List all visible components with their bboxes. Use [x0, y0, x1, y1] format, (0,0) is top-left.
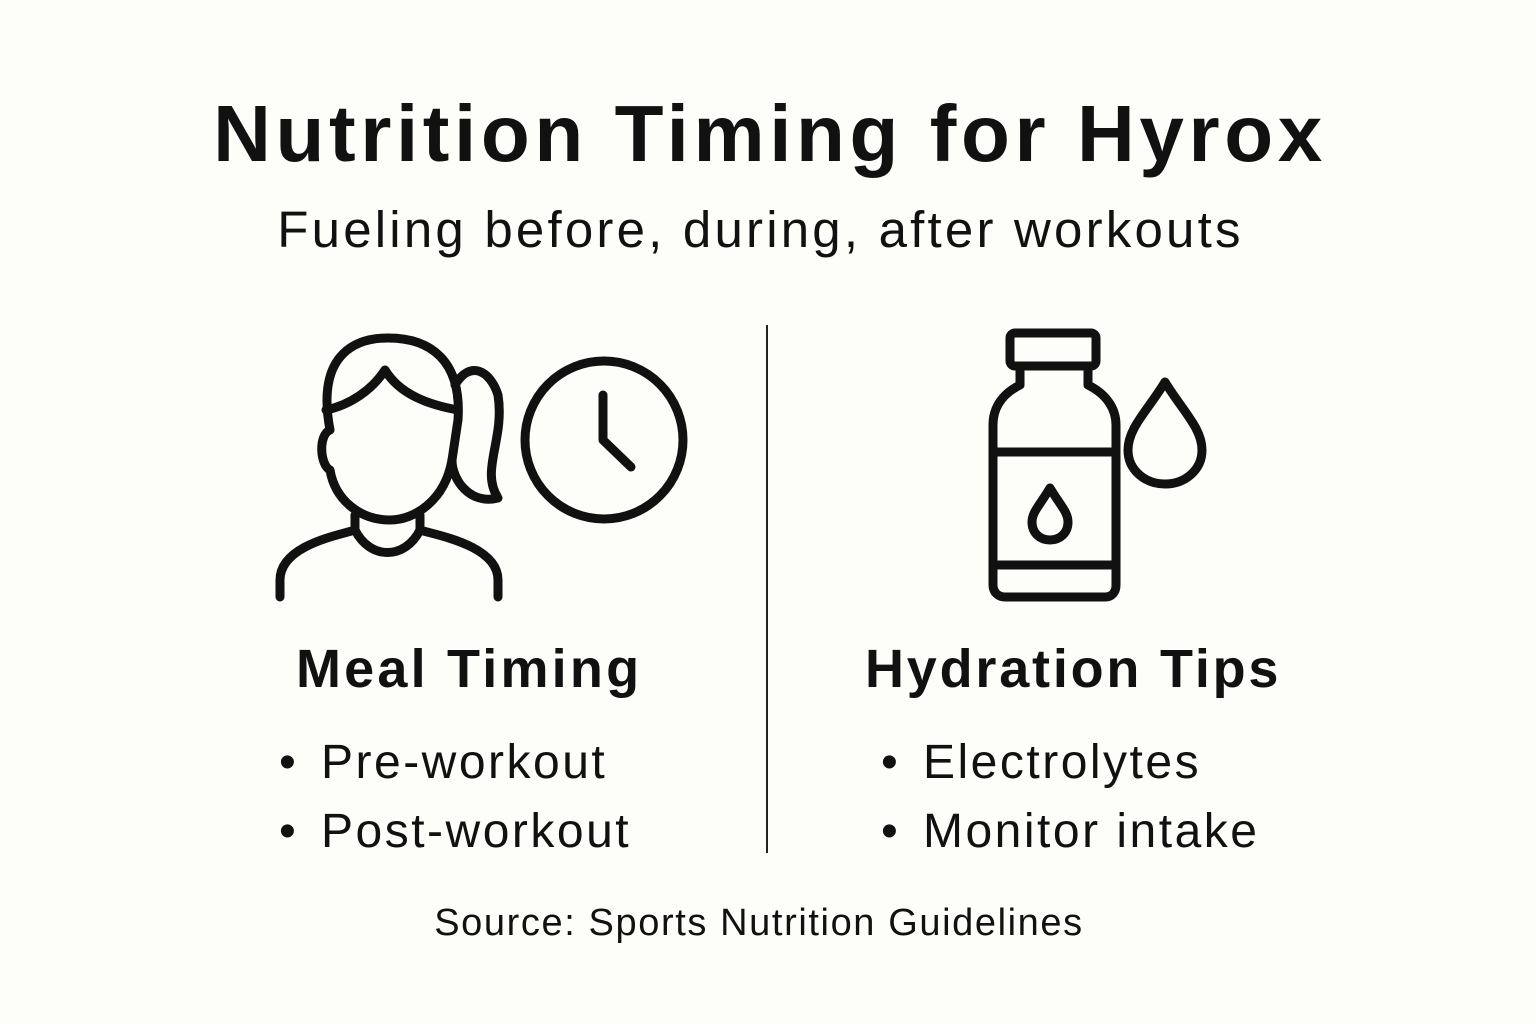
text: • [881, 805, 898, 858]
heading: hydration tips: Hydration Tips [865, 639, 1281, 699]
list: meal timing [279, 736, 631, 858]
list: meal timing: Pre-workout [321, 736, 607, 789]
text: • [279, 736, 296, 789]
heading: meal timing: Meal Timing [296, 639, 642, 699]
text: • [881, 736, 898, 789]
divider [766, 325, 768, 853]
list: hydration tips: Electrolytes [923, 736, 1201, 789]
source: Source: Sports Nutrition Guidelines [434, 902, 1084, 944]
list: hydration tips [881, 736, 1259, 858]
subtitle: Fueling before, during, after workouts [277, 201, 1244, 258]
text: • [279, 805, 296, 858]
list: hydration tips: Monitor intake [923, 805, 1259, 858]
title: Nutrition Timing for Hyrox [213, 89, 1327, 178]
list: meal timing: Post-workout [321, 805, 631, 858]
icon: bottle with drops [993, 333, 1202, 597]
